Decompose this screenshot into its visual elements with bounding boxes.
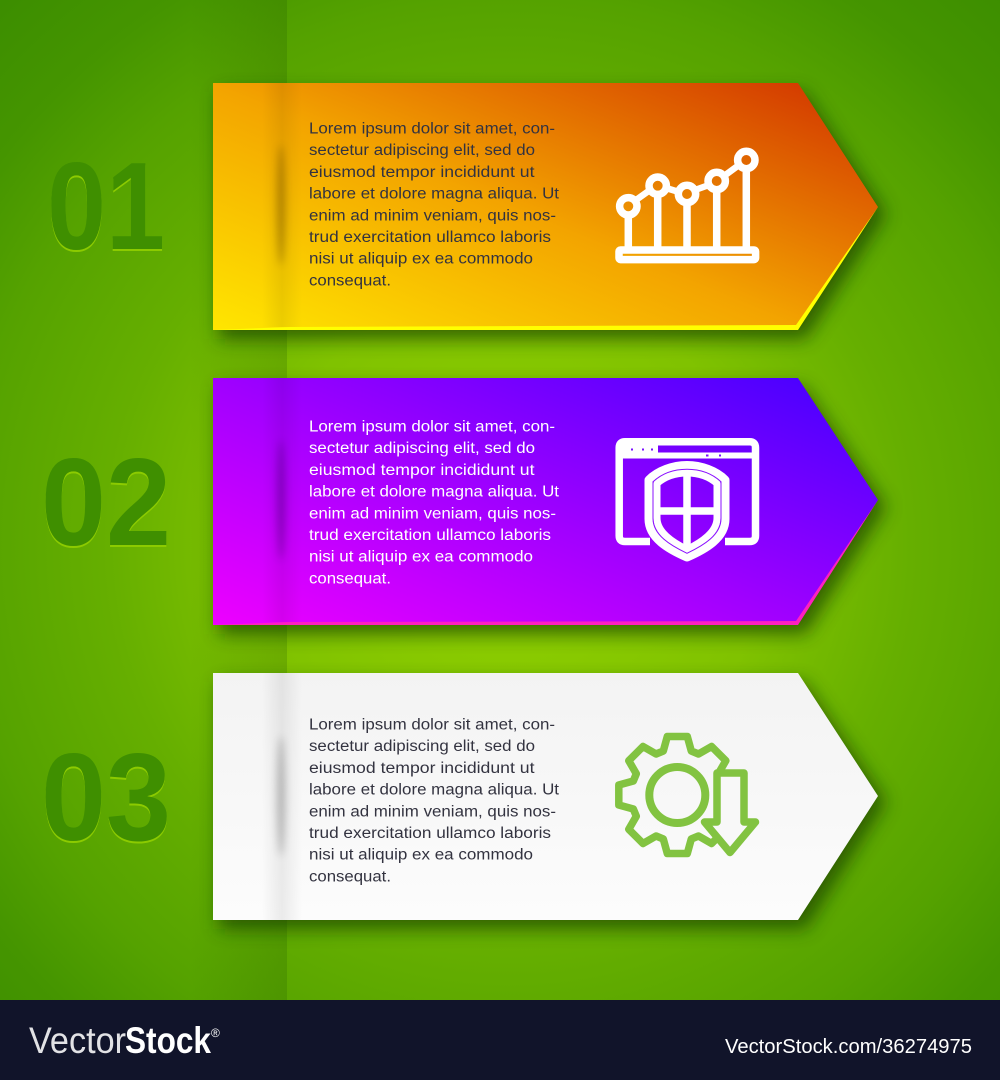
card 2 text: trud exercitation ullamco laboris	[309, 527, 551, 544]
card 3 text: consequat.	[309, 868, 391, 885]
panel: step 1 arrow card	[213, 83, 886, 339]
panel: step 2 arrow card	[213, 378, 886, 634]
number 03: 03	[41, 729, 171, 867]
card 2 text	[309, 418, 560, 587]
card 1 text: trud exercitation ullamco laboris	[309, 229, 551, 246]
card 2 highlight edge	[213, 500, 878, 625]
footer logo: ®	[211, 1026, 220, 1040]
number 01: 01	[47, 140, 165, 278]
card 3 text: trud exercitation ullamco laboris	[309, 825, 551, 842]
card 1 fold	[262, 83, 302, 327]
card 1 text: nisi ut aliquip ex ea commodo	[309, 251, 533, 268]
footer image id: VectorStock.com/36274975	[725, 1036, 972, 1058]
card 1 text: enim ad minim veniam, quis nos-	[309, 207, 556, 224]
card 2 text: consequat.	[309, 570, 391, 587]
card 2 text: nisi ut aliquip ex ea commodo	[309, 549, 533, 566]
card 3 fold	[262, 673, 302, 920]
card 3 text: eiusmod tempor incididunt ut	[309, 760, 535, 777]
card 1 text: labore et dolore magna aliqua. Ut	[309, 186, 560, 203]
card 1 body	[213, 83, 878, 330]
card 3 text: sectetur adipiscing elit, sed do	[309, 738, 535, 755]
card 2 text: sectetur adipiscing elit, sed do	[309, 440, 535, 457]
card 3 text	[309, 716, 560, 885]
number 03: 03	[41, 731, 171, 869]
card 3 text: Lorem ipsum dolor sit amet, con-	[309, 716, 555, 734]
card 2 shadow	[219, 387, 886, 634]
icon: browser window with shield	[619, 442, 756, 557]
icon: rising line chart	[619, 151, 756, 260]
card 1 text: Lorem ipsum dolor sit amet, con-	[309, 120, 555, 138]
card 1 text: sectetur adipiscing elit, sed do	[309, 142, 535, 159]
number 01: 01	[47, 138, 165, 276]
card 1 shadow	[219, 92, 886, 339]
card 3 body	[213, 673, 878, 920]
card 2 text: enim ad minim veniam, quis nos-	[309, 505, 556, 522]
panel: step 3 arrow card	[213, 673, 886, 929]
icon: gear with down arrow	[619, 736, 756, 854]
card 2 text: labore et dolore magna aliqua. Ut	[309, 484, 560, 501]
card 1 highlight edge	[213, 207, 878, 330]
card 3 text: labore et dolore magna aliqua. Ut	[309, 782, 560, 799]
footer logo: Vector	[29, 1020, 126, 1061]
card 1 text	[309, 120, 560, 289]
card 3 shadow	[219, 682, 886, 929]
card 2 text: eiusmod tempor incididunt ut	[309, 462, 535, 479]
card 2 body	[213, 378, 878, 625]
card 1 text: eiusmod tempor incididunt ut	[309, 164, 535, 181]
card 2 fold	[262, 378, 302, 622]
card 1 text: consequat.	[309, 272, 391, 289]
number 02: 02	[41, 436, 171, 574]
footer bar	[0, 1000, 1000, 1080]
card 3 text: enim ad minim veniam, quis nos-	[309, 803, 556, 820]
card 2 text: Lorem ipsum dolor sit amet, con-	[309, 418, 555, 436]
card 3 text: nisi ut aliquip ex ea commodo	[309, 847, 533, 864]
footer logo	[29, 1020, 220, 1061]
footer logo: Stock	[125, 1020, 211, 1061]
number 02: 02	[41, 434, 171, 572]
